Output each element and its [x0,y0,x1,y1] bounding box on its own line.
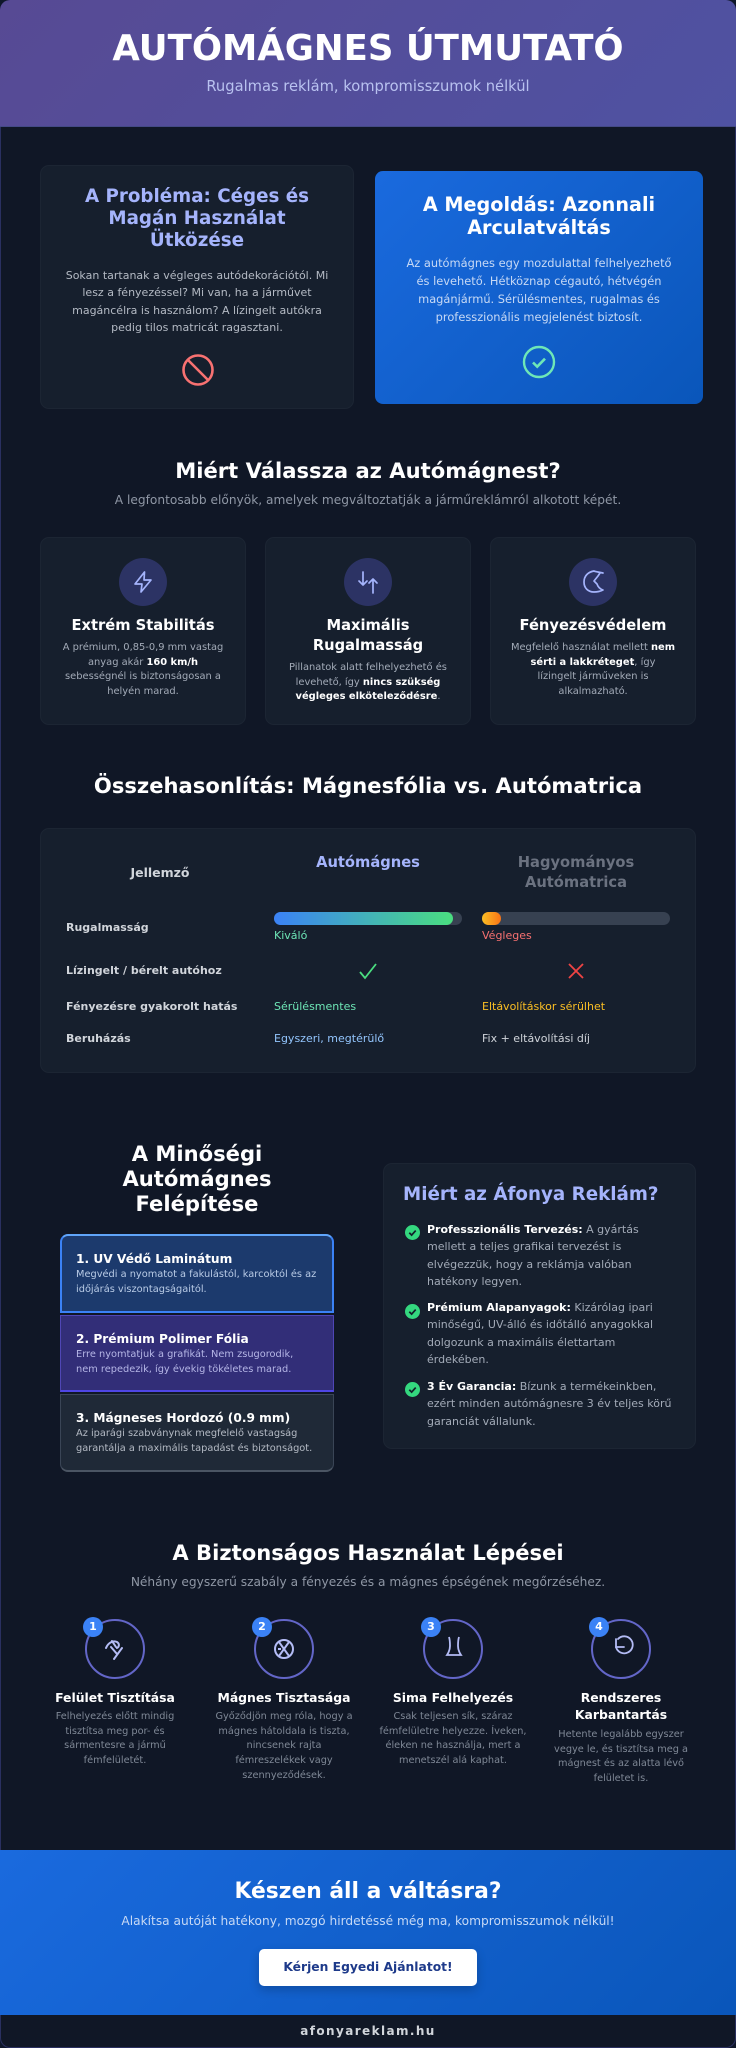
step 2 text: nincsenek rajta [247,1740,321,1751]
CTA heading: Készen áll a váltásra? [234,1879,501,1904]
panel: comparison table [40,828,696,1073]
item 1 text: hatékony legyen. [427,1275,522,1288]
problem heading: Magán Használat [108,208,286,229]
step 4 icon [591,1619,651,1679]
problem heading: A Probléma: Céges és [85,186,309,207]
flexibility title [313,617,423,654]
table header: feature: Jellemző [130,865,190,880]
layer 2 text: nem repedezik, így évekig tökéletes marad. [76,1364,291,1374]
solution text: és levehető. Hétköznap cégautó, hétvégén [417,274,661,288]
stability text: helyén marad. [107,686,179,697]
item 3 text: ezért minden autómágnesre 3 év teljes körű [427,1397,671,1410]
footer website: afonyareklam.hu [300,2024,436,2038]
flexibility title: Rugalmasság [313,637,423,654]
step 3 text: Csak teljesen sík, száraz [393,1711,513,1722]
section heading: structure: Autómágnes [122,1166,272,1191]
problem text: Sokan tartanak a végleges autódekorációtól. Mi [66,269,328,282]
icon: arrows [344,558,392,606]
bar: sticker flexibility [482,912,670,925]
icon: lightning [119,558,167,606]
item 2 text [427,1301,653,1366]
icon: check circle [522,346,556,378]
item 3 text: 3 Év Garancia: Bízunk a termékeinkben, [427,1380,656,1393]
flexibility text: végleges elköteleződésre. [296,691,440,702]
step 4 title: Rendszeres [581,1690,661,1705]
table header: traditional sticker: Hagyományos [518,854,634,871]
paint protection text: alkalmazható. [558,686,628,697]
solution text: professzionális megjelenést biztosít. [436,310,642,324]
CTA text: Alakítsa autóját hatékony, mozgó hirdetéssé még ma, kompromisszumok nélkül! [121,1914,615,1928]
section subheading: safe use: Néhány egyszerű szabály a fényezés és a mágnes épségének megőrzéséhez. [131,1575,605,1589]
table header: traditional sticker: Autómatrica [525,874,627,890]
layer 3 text: Az iparági szabványnak megfelelő vastagság [76,1428,297,1439]
step 3 badge: 3 [427,1620,435,1633]
step 1 title: Felület Tisztítása [55,1690,175,1705]
step 3 badge [421,1617,441,1637]
problem text: lesz a fényezéssel? Mi van, ha a járművet [82,286,312,299]
header banner [0,0,736,127]
stability text: A prémium, 0,85-0,9 mm vastag [63,642,223,653]
solution text: Az autómágnes egy mozdulattal felhelyezhető [406,256,672,270]
value: no damage: Sérülésmentes [274,1000,356,1013]
step 3 text: fémfelületre helyezze. Íveken, [380,1726,526,1737]
step 1 badge: 1 [89,1620,97,1633]
stability text: anyag akár 160 km/h [88,657,198,668]
paint protection text: lízingelt járműveken is [538,671,648,682]
step 1 badge [83,1617,103,1637]
step 3 text [380,1711,526,1766]
layer 1 text: időjárás viszontagságaitól. [76,1284,207,1294]
icon: crescent shield [569,558,617,606]
paint protection title: Fényezésvédelem [520,617,666,634]
step 1 text [56,1711,174,1766]
section heading: structure: A Minőségi [132,1141,262,1166]
step 2 text: Győződjön meg róla, hogy a [215,1711,353,1722]
icon: application [445,1636,463,1656]
icon: check [359,964,377,980]
item 3 text: garanciát vállalunk. [427,1415,536,1428]
item 2 text: minőségű, UV-álló és időtálló anyagokkal [427,1318,653,1331]
item 2 text: érdekében. [427,1353,489,1366]
bar: car magnet flexibility [274,912,462,925]
paint protection text: Megfelelő használat mellett nem [511,642,675,653]
layer 1 text [76,1269,316,1294]
section subheading: benefits: A legfontosabb előnyök, amelyek megváltoztatják a járműreklámról alkotott képét. [115,493,621,507]
item 1 text: mellett a teljes grafikai tervezést is [427,1240,621,1253]
bar label: excellent: Kiváló [274,929,307,942]
icon: maintenance cycle [615,1635,634,1654]
layer 3: magnetic carrier [60,1394,334,1472]
layer 2: polymer film [60,1315,334,1392]
icon: cross [568,963,584,979]
problem text: pedig tilos matricát ragasztani. [111,321,283,334]
flexibility title: Maximális [326,617,410,634]
stability text [62,642,223,697]
step 4 badge: 4 [595,1620,603,1633]
step 1 icon [85,1619,145,1679]
problem heading [85,186,309,251]
step 3 text: menetszél alá kaphat. [399,1755,507,1766]
stability title: Extrém Stabilitás [72,617,214,634]
CTA button [259,1949,477,1986]
step 2 badge: 2 [258,1620,266,1633]
layer 2 text: Erre nyomtatjuk a grafikát. Nem zsugorodik, [76,1349,293,1360]
panel: solution [375,171,703,404]
icon: check badge 2 [405,1304,420,1319]
panel: why Áfonya [383,1163,696,1449]
icon: prohibited [182,354,214,386]
step 2 text: szennyeződések. [242,1770,326,1781]
step 2 text: mágnes hátoldala is tiszta, [218,1726,350,1737]
layer 3 text: garantálja a maximális tapadást és biztonságot. [76,1442,312,1454]
flexibility text: levehető, így nincs szükség [296,677,440,688]
solution text [406,256,672,324]
paint protection text: sérti a lakkréteget, így [531,657,655,668]
problem text: magáncélra is használom? A lízingelt autókra [72,304,322,317]
item 3 text [427,1380,671,1428]
step 2 icon [254,1619,314,1679]
flexibility text [289,662,447,702]
step 3 text: éleken ne használja, mert a [385,1740,521,1751]
step 4 title [575,1690,667,1722]
problem heading: Ütközése [150,230,244,251]
item 1 text [427,1223,639,1288]
value: fixed plus removal: Fix + eltávolítási díj [482,1032,590,1045]
call to action banner [0,1850,736,2015]
row label: leased cars: Lízingelt / bérelt autóhoz [66,964,222,977]
panel: problem [40,165,354,409]
panel: flexibility card [265,537,471,725]
row label: investment: Beruházás [66,1032,131,1045]
layer 2 text [76,1349,293,1374]
icon: check badge 1 [405,1225,420,1240]
title: AUTÓMÁGNES ÚTMUTATÓ [112,28,624,69]
step 4 text: vegye le, és tisztítsa meg a [554,1744,688,1755]
step 1 text: Felhelyezés előtt mindig [56,1711,174,1722]
row label: flexibility: Rugalmasság [66,921,149,934]
step 1 text: fémfelületét. [84,1755,146,1766]
step 4 badge [589,1617,609,1637]
layer 1 title: 1. UV Védő Laminátum [76,1252,232,1266]
solution text: magánjármű. Sérülésmentes, rugalmas és [418,292,660,306]
layer 1 text: Megvédi a nyomatot a fakulástól, karcoktól és az [76,1269,316,1280]
step 3 title: Sima Felhelyezés [393,1690,513,1705]
problem text [66,269,328,334]
item 2 text: dolgozunk a maximális élettartam [427,1336,615,1349]
step 2 text: fémreszelékek vagy [235,1755,333,1766]
step 4 text: Hetente legalább egyszer [558,1729,684,1740]
solution heading: Arculatváltás [467,216,611,239]
value: one-off: Egyszeri, megtérülő [274,1032,384,1045]
step 2 title: Mágnes Tisztasága [217,1690,350,1705]
table header: traditional sticker [518,854,634,890]
solution heading: A Megoldás: Azonnali [423,193,655,216]
step 1 text: tisztítsa meg por- és [65,1726,165,1737]
icon: magnet cleaning [274,1639,294,1659]
row label: paint effect: Fényezésre gyakorolt hatás [66,1000,237,1013]
step 4 text: mágnest és az alatta lévő [558,1758,684,1769]
section heading: safe use: A Biztonságos Használat Lépései [172,1540,564,1565]
step 4 title: Karbantartás [575,1707,667,1722]
panel: stability card [40,537,246,725]
section heading: structure [122,1141,272,1216]
section heading: comparison: Összehasonlítás: Mágnesfólia vs. Autómatrica [94,773,642,798]
item 1 text: Professzionális Tervezés: A gyártás [427,1223,639,1236]
step 2 text [215,1711,353,1781]
stability text: sebességnél is biztonságosan a [65,671,221,682]
step 2 badge [252,1617,272,1637]
item 2 text: Prémium Alapanyagok: Kizárólag ipari [427,1301,653,1314]
layer 3 text [76,1428,312,1454]
step 4 text: felületet is. [594,1773,648,1784]
icon: check badge 3 [405,1382,420,1397]
icon: cleaning [105,1640,123,1660]
CTA button: Kérjen Egyedi Ajánlatot! [283,1960,453,1974]
layer 3 title: 3. Mágneses Hordozó (0.9 mm) [76,1411,290,1425]
layer 1: UV laminate [60,1234,334,1313]
section heading: benefits: Miért Válassza az Autómágnest? [175,458,561,483]
step 4 text [554,1729,688,1784]
subtitle: Rugalmas reklám, kompromisszumok nélkül [206,78,530,95]
panel: paint protection card [490,537,696,725]
item 1 text: elvégezzük, hogy a reklámja valóban [427,1258,632,1271]
value: may be damaged: Eltávolításkor sérülhet [482,1000,605,1013]
flexibility text: Pillanatok alatt felhelyezhető és [289,662,447,673]
table header: car magnet: Autómágnes [316,854,420,871]
bar label: permanent: Végleges [482,929,532,942]
section heading: structure: Felépítése [136,1191,258,1216]
why heading: Miért az Áfonya Reklám? [403,1184,659,1205]
step 1 text: sármentesre a jármű [64,1740,166,1751]
paint protection text [511,642,675,697]
solution heading [423,193,655,239]
layer 2 title: 2. Prémium Polimer Fólia [76,1332,249,1346]
step 3 icon [423,1619,483,1679]
